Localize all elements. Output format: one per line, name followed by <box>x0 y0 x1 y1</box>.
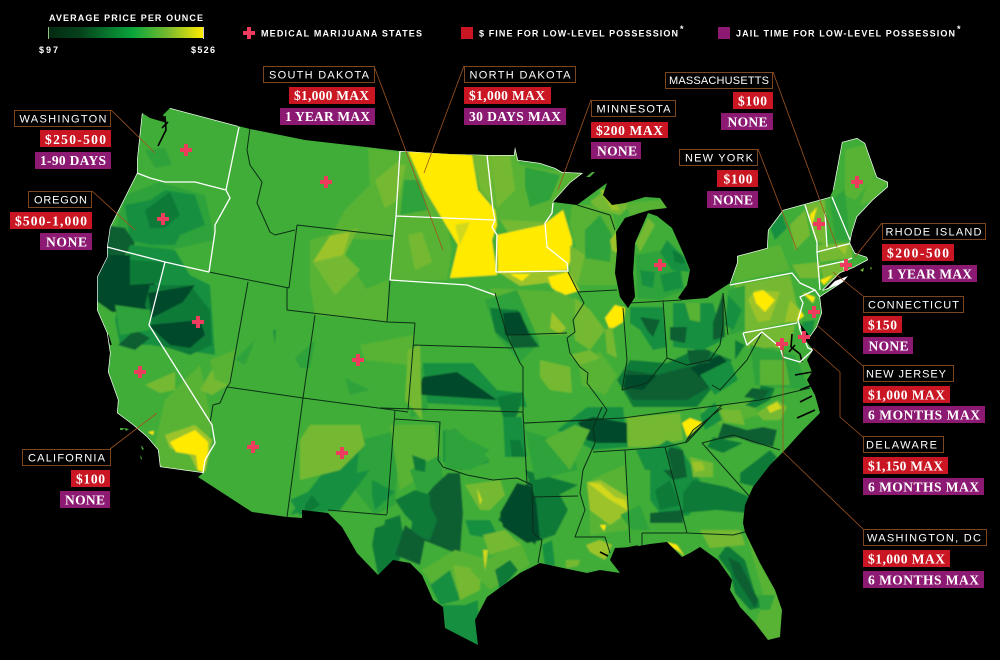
legend: average price per ounce: AVERAGE PRICE PER OUNCE <box>49 13 203 23</box>
callout: North Dakota: $1,000 MAX <box>469 88 545 103</box>
callout: Washington: 1-90 DAYS <box>40 153 106 168</box>
callout: California: NONE <box>65 492 105 508</box>
north plains <box>330 148 400 240</box>
callout: Oregon: OREGON <box>34 194 87 206</box>
legend: jail time for possession <box>718 24 961 39</box>
callout: Massachusetts: MASSACHUSETTS <box>669 75 769 87</box>
callout: Minnesota: $200 MAX <box>596 123 663 138</box>
panel: price heat map of the contiguous United States <box>90 100 900 650</box>
white state borders <box>107 127 852 473</box>
texas and oklahoma <box>290 452 359 515</box>
callout: Oregon <box>10 192 92 250</box>
callout: Washington: WASHINGTON <box>20 114 107 126</box>
legend: average price per ounce: $97 <box>39 45 58 55</box>
callout: Delaware: 6 MONTHS MAX <box>868 480 979 494</box>
callout: New Jersey: NEW JERSEY <box>866 368 947 380</box>
callout: Oregon: NONE <box>46 234 87 250</box>
callout: Washington, DC <box>863 530 986 588</box>
florida <box>745 530 782 640</box>
callout: New Jersey: $1,000 MAX <box>868 388 945 402</box>
callout: Minnesota: NONE <box>597 144 637 158</box>
legend: fine for possession: * <box>680 24 684 34</box>
callout: Delaware <box>863 436 984 495</box>
callout: California <box>22 450 110 508</box>
colorado and utah accents <box>236 342 254 364</box>
callout: New York: NEW YORK <box>685 152 754 164</box>
legend: average price per ounce: $526 <box>191 45 215 55</box>
black state borders <box>209 128 810 563</box>
callout: Washington <box>14 110 111 169</box>
callout: New York: NONE <box>713 192 753 208</box>
callout: Rhode Island: RHODE ISLAND <box>886 226 982 238</box>
medical marijuana state markers <box>134 144 863 459</box>
callout: North Dakota <box>464 66 576 125</box>
callout: Massachusetts: $100 <box>738 94 767 108</box>
callout: Delaware: $1,150 MAX <box>868 458 943 474</box>
callout: Washington, DC: $1,000 MAX <box>868 552 945 566</box>
callout: Minnesota <box>591 100 676 159</box>
callout: Rhode Island: $200-500 <box>887 246 949 260</box>
legend: jail time for possession: * <box>957 24 961 34</box>
callout: Connecticut: NONE <box>868 338 908 354</box>
callout: Massachusetts <box>666 72 773 130</box>
callout: New York <box>680 150 758 208</box>
callout: South Dakota <box>264 66 375 125</box>
white coastlines of highlighted states <box>97 108 888 467</box>
callout: Washington, DC: WASHINGTON, DC <box>867 532 981 544</box>
legend: fine for possession <box>461 24 684 39</box>
island details <box>586 172 595 177</box>
callout: Washington: $250-500 <box>45 132 106 147</box>
callout: Rhode Island <box>882 224 986 282</box>
deep south <box>650 440 700 520</box>
lake michigan <box>615 213 648 308</box>
callout: South Dakota: 1 YEAR MAX <box>285 109 370 124</box>
michigan <box>636 218 655 252</box>
callout: New York: $100 <box>724 172 753 186</box>
leader lines <box>92 66 882 529</box>
callout: New Jersey <box>863 366 985 423</box>
legend: medical marijuana states: MEDICAL MARIJUANA STATES <box>261 28 422 38</box>
callout: South Dakota: $1,000 MAX <box>294 88 369 103</box>
callout: Massachusetts: NONE <box>728 114 768 130</box>
central dark patches <box>485 290 540 362</box>
callout: North Dakota: 30 DAYS MAX <box>469 109 561 124</box>
kentucky, tennessee and appalachians <box>627 413 683 447</box>
callout: Delaware: DELAWARE <box>866 440 937 452</box>
callout: Minnesota: MINNESOTA <box>596 104 671 116</box>
callout: South Dakota: SOUTH DAKOTA <box>269 70 370 82</box>
callout: Connecticut <box>863 296 964 354</box>
callout: Oregon: $500-1,000 <box>15 214 87 228</box>
water details <box>158 116 168 146</box>
west <box>146 148 172 168</box>
northeast <box>770 213 787 240</box>
legend: jail time for possession: JAIL TIME FOR LOW-LEVEL POSSESSION <box>736 28 955 38</box>
callout: Rhode Island: 1 YEAR MAX <box>887 266 972 282</box>
legend: average price per ounce <box>39 13 215 55</box>
callout: Washington, DC: 6 MONTHS MAX <box>868 572 979 588</box>
legend: fine for possession: $ FINE FOR LOW-LEVEL POSSESSION <box>479 28 678 38</box>
callout: North Dakota: NORTH DAKOTA <box>470 70 571 82</box>
callout: New Jersey: 6 MONTHS MAX <box>868 408 980 422</box>
callout: California: $100 <box>76 472 105 486</box>
callout: Connecticut: $150 <box>868 318 897 332</box>
callout: California: CALIFORNIA <box>28 452 106 464</box>
callout: Connecticut: CONNECTICUT <box>868 300 959 312</box>
